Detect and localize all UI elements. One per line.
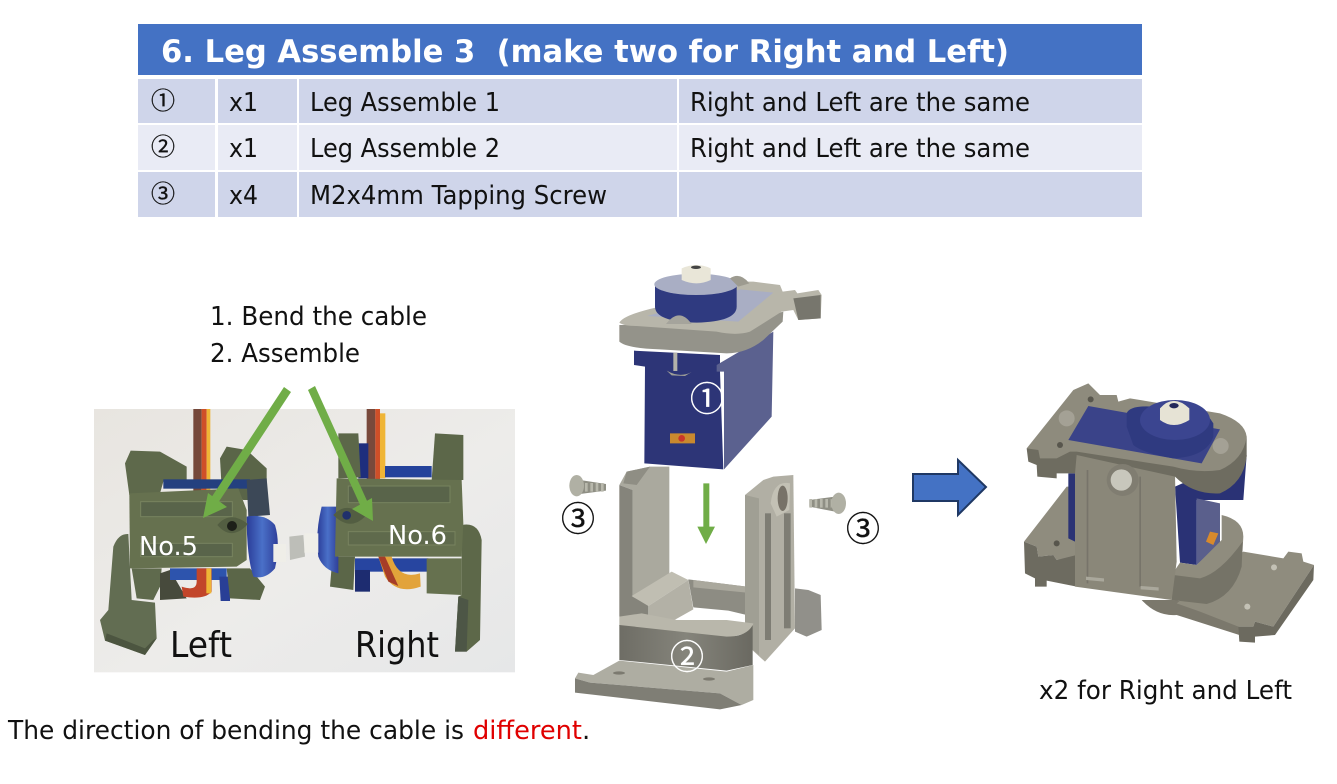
number 1 on servo: ① bbox=[690, 372, 724, 421]
table row 3: M2x4mm Tapping Screw bbox=[310, 181, 607, 211]
number 3 right screw: ③ bbox=[846, 502, 880, 551]
blue result arrow bbox=[913, 460, 986, 515]
table row 2: x1 bbox=[229, 134, 258, 164]
screw right bbox=[809, 493, 846, 514]
table row 3: ③ bbox=[151, 174, 175, 209]
table title bar: 6. Leg Assemble 3 (make two for Right and Left) bbox=[161, 34, 1009, 70]
number 3 left screw: ③ bbox=[561, 492, 595, 541]
servo body bbox=[1068, 473, 1075, 542]
green arrow to No.5 bbox=[203, 387, 291, 518]
table row 2: Leg Assemble 2 bbox=[310, 134, 500, 164]
table row 1: ① bbox=[151, 81, 175, 116]
note: bending direction: The direction of bending the cable is bbox=[7, 716, 464, 746]
assembled leg view bbox=[1024, 383, 1314, 643]
front screw bbox=[1107, 464, 1139, 496]
parts table bbox=[138, 24, 1142, 217]
table row 2: ② bbox=[151, 127, 175, 162]
part 2: lower bracket bbox=[575, 467, 822, 709]
table row 1 bbox=[138, 79, 1142, 123]
table row 1: Right and Left are the same bbox=[690, 88, 1030, 118]
note: bending direction: different bbox=[473, 716, 582, 746]
table row 1: x1 bbox=[229, 88, 258, 118]
caption: x2 for Right and Left: x2 for Right and Left bbox=[1039, 676, 1292, 706]
side curved block bbox=[1172, 515, 1243, 604]
photo: left and right legs bbox=[94, 409, 515, 672]
screw left bbox=[569, 475, 606, 496]
green arrow to No.6 bbox=[308, 386, 373, 521]
left leg assembly bbox=[100, 409, 305, 655]
table row 2 bbox=[138, 125, 1142, 170]
label: Right: Right bbox=[355, 625, 439, 666]
bracket front wall bbox=[1075, 453, 1177, 600]
exploded assembly view bbox=[569, 265, 846, 709]
right leg assembly bbox=[304, 409, 482, 652]
table row 1: Leg Assemble 1 bbox=[310, 88, 500, 118]
base plate bbox=[1177, 552, 1314, 627]
instruction text bbox=[210, 302, 427, 369]
table row 2: Right and Left are the same bbox=[690, 134, 1030, 164]
top plate bbox=[1027, 437, 1247, 493]
rear foot bbox=[1024, 487, 1077, 560]
number 2 on bracket: ② bbox=[670, 630, 704, 679]
table row 3: x4 bbox=[229, 181, 258, 211]
servo horn bbox=[1127, 405, 1213, 458]
instruction text: 1. Bend the cable bbox=[210, 302, 427, 332]
table title bar bbox=[138, 24, 1142, 75]
green down arrow bbox=[697, 483, 715, 544]
instruction text: 2. Assemble bbox=[210, 339, 360, 369]
table row 3 bbox=[138, 172, 1142, 217]
label: Left: Left bbox=[170, 625, 232, 666]
label: No.5: No.5 bbox=[139, 532, 198, 562]
label: No.6: No.6 bbox=[388, 521, 447, 551]
note: bending direction: . bbox=[582, 716, 590, 746]
part 1: servo with upper bracket bbox=[619, 265, 822, 469]
